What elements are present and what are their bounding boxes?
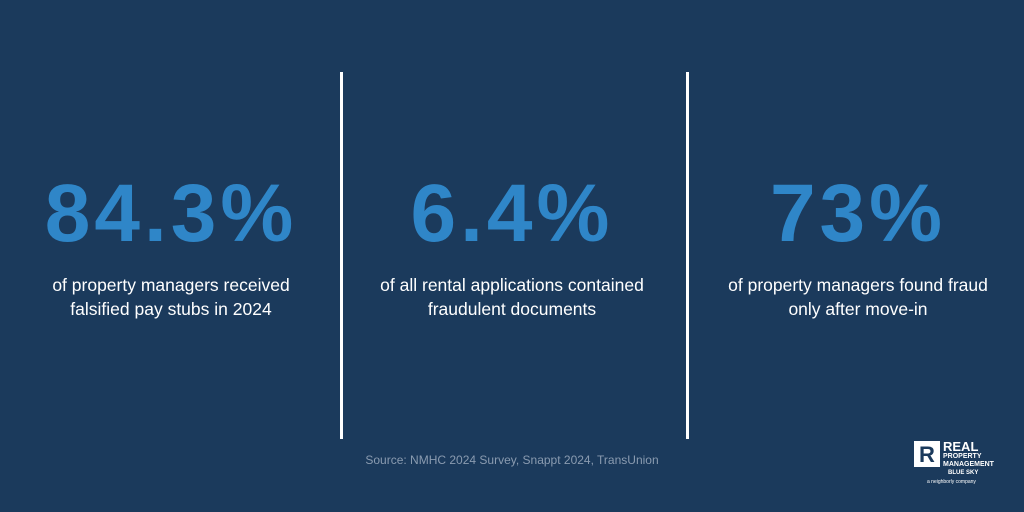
logo: MANAGEMENT bbox=[943, 461, 994, 468]
divider right bbox=[686, 72, 689, 439]
logo: a neighborly company bbox=[927, 479, 976, 485]
stat 3: of property managers found fraud bbox=[728, 275, 988, 295]
stat 3: 73% bbox=[770, 168, 946, 259]
stat 2: of all rental applications contained bbox=[380, 275, 644, 295]
stat 2: 6.4% bbox=[411, 168, 613, 259]
stat 1: of property managers received bbox=[52, 275, 290, 295]
stat 1: falsified pay stubs in 2024 bbox=[70, 299, 272, 319]
logo: REAL bbox=[943, 439, 978, 454]
stat 3 bbox=[728, 168, 988, 319]
logo: R bbox=[919, 442, 935, 467]
stat 3: only after move-in bbox=[788, 299, 928, 319]
source: Source: NMHC 2024 Survey, Snappt 2024, TransUnion bbox=[365, 453, 659, 467]
logo: PROPERTY bbox=[943, 453, 982, 460]
stat 2: fraudulent documents bbox=[428, 299, 596, 319]
logo: BLUE SKY bbox=[948, 470, 978, 476]
logo bbox=[914, 439, 994, 485]
stat 1 bbox=[45, 168, 297, 319]
stat 2 bbox=[380, 168, 644, 319]
stat 1: 84.3% bbox=[45, 168, 297, 259]
divider left bbox=[340, 72, 343, 439]
